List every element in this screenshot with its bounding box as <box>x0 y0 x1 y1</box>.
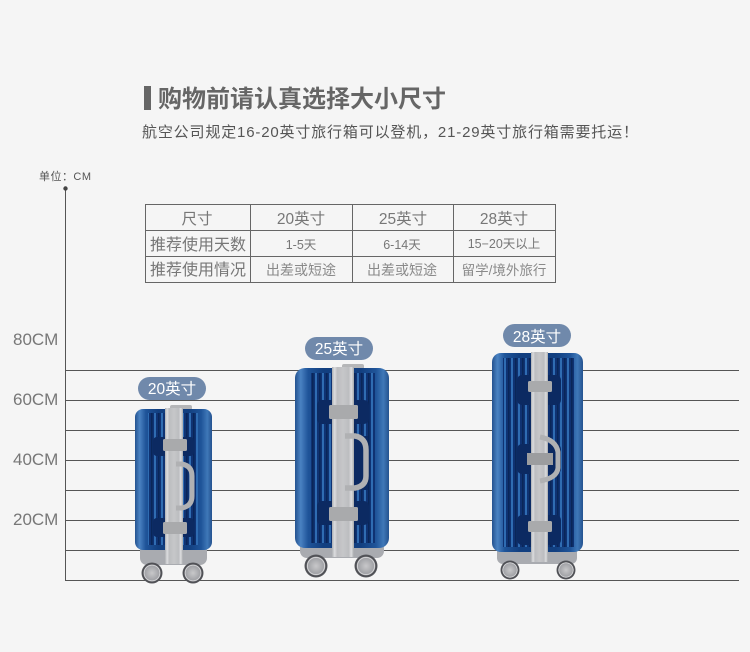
table header row: 25英寸 <box>379 210 427 228</box>
axis labels <box>13 330 58 529</box>
heading text: 购物前请认真选择大小尺寸 <box>158 86 446 113</box>
handle <box>345 436 366 488</box>
axis labels: 60CM <box>13 390 58 409</box>
wheels <box>140 542 207 584</box>
unit label: 单位：CM <box>39 169 91 183</box>
locks <box>163 439 187 534</box>
heading marker bar <box>144 86 151 110</box>
heading <box>144 86 446 113</box>
size table <box>145 204 556 283</box>
suitcase: 28 inch <box>492 352 583 580</box>
table row: recommended days: 15−20天以上 <box>468 237 540 251</box>
table row: recommended use: 出差或短途 <box>266 262 336 278</box>
locks <box>329 405 358 521</box>
locks <box>527 381 553 532</box>
suitcase: 25 inch <box>295 364 389 578</box>
table header row: 20英寸 <box>277 210 325 228</box>
subtitle: 航空公司规定16-20英寸旅行箱可以登机，21-29英寸旅行箱需要托运！ <box>142 123 638 141</box>
size tag: 28 inch: 28英寸 <box>513 328 561 346</box>
size tag: 25 inch: 25英寸 <box>315 340 363 358</box>
wheels <box>300 538 384 578</box>
table header row: 尺寸 <box>181 210 213 228</box>
suitcase: 20 inch <box>135 405 212 584</box>
handle <box>176 464 192 508</box>
table row: recommended use <box>150 261 546 279</box>
handle <box>540 437 558 481</box>
table row: recommended use: 出差或短途 <box>367 262 437 278</box>
chart axes and gridlines <box>63 186 739 581</box>
size tag: 20 inch: 20英寸 <box>148 380 196 398</box>
table row: recommended days <box>150 236 540 254</box>
table row: recommended use: 推荐使用情况 <box>150 261 246 279</box>
size tag: 28 inch <box>503 324 571 347</box>
axis labels: 20CM <box>13 510 58 529</box>
table row: recommended days: 6-14天 <box>383 238 421 252</box>
table row: recommended use: 留学/境外旅行 <box>462 263 546 278</box>
size tag: 20 inch <box>138 377 206 400</box>
table header row <box>181 210 528 228</box>
size tag: 25 inch <box>305 337 373 360</box>
table row: recommended days: 1-5天 <box>286 238 317 252</box>
axis labels: 40CM <box>13 450 58 469</box>
wheels <box>497 546 577 580</box>
table row: recommended days: 推荐使用天数 <box>150 236 246 254</box>
table header row: 28英寸 <box>480 210 528 228</box>
axis labels: 80CM <box>13 330 58 349</box>
